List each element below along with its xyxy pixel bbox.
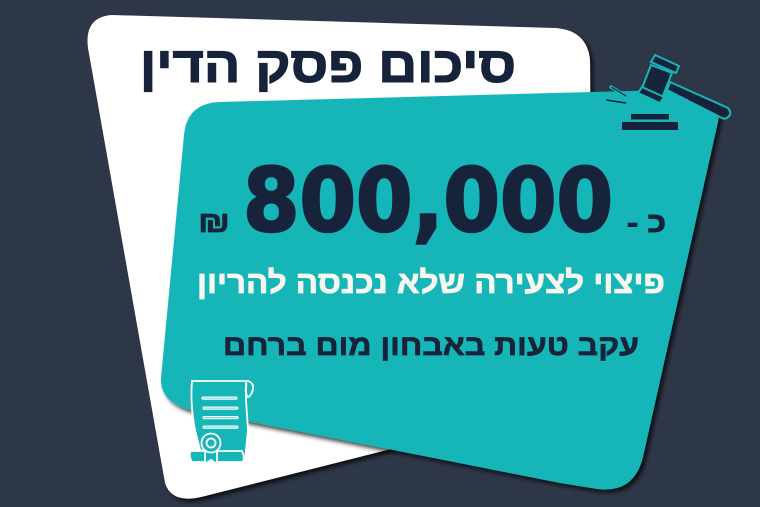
subtitle: dark line: עקב טעות באבחון מום ברחם bbox=[223, 330, 639, 362]
panel: white back card bbox=[88, 15, 591, 499]
icon: gavel bbox=[606, 55, 730, 130]
amount: 800,000: 800,000 bbox=[243, 150, 613, 252]
subtitle: white line: פיצוי לצעירה שלא נכנסה להריון bbox=[197, 265, 665, 300]
amount: about: כ - bbox=[627, 207, 666, 238]
panel: teal main card bbox=[161, 90, 719, 490]
amount: shekel sign: ₪ bbox=[198, 206, 230, 239]
title: סיכום פסק הדין bbox=[140, 37, 516, 93]
icon: scroll certificate bbox=[190, 381, 253, 464]
